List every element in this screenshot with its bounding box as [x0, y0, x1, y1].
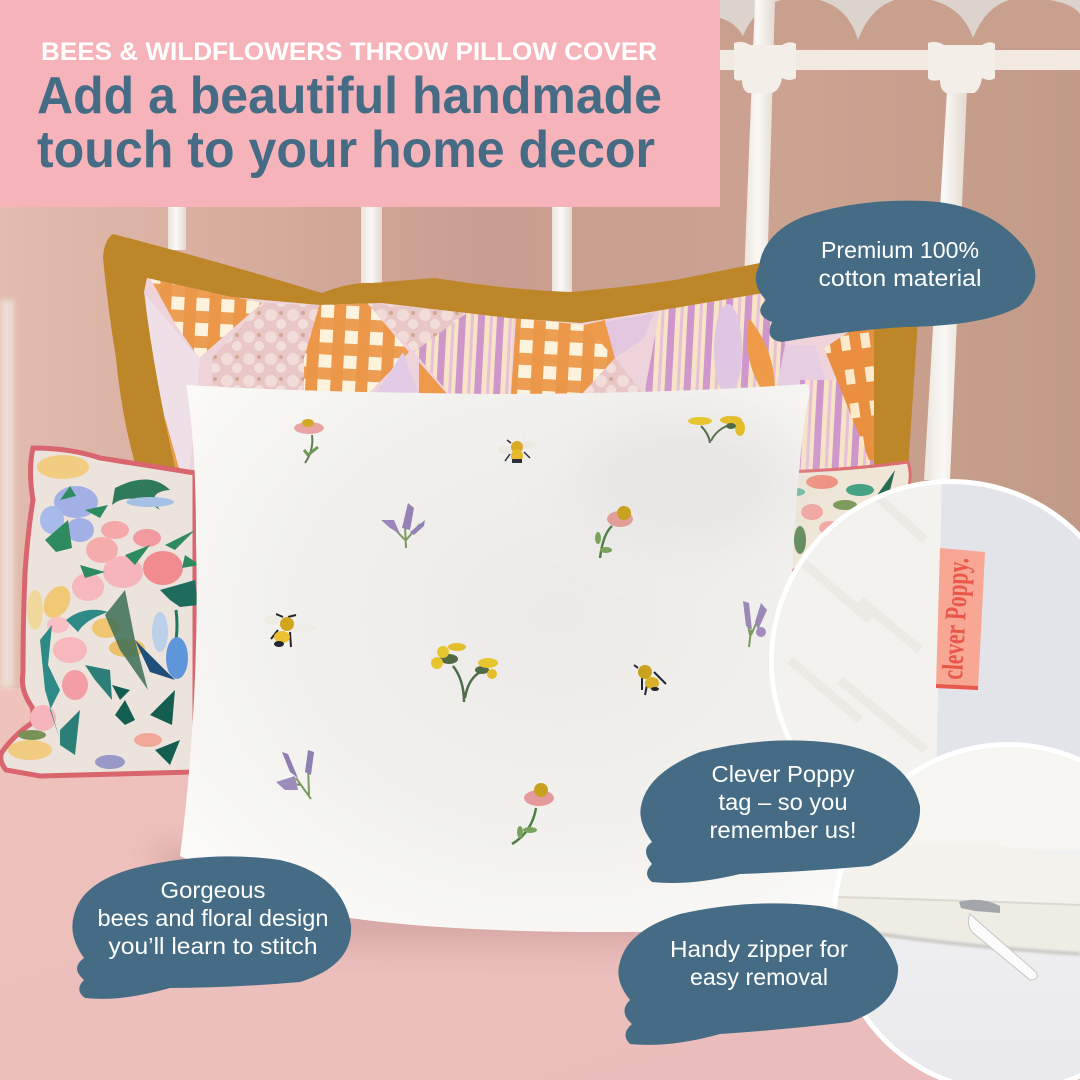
- callout: Clever Poppy tag: remember us!: [710, 817, 856, 843]
- scalloped wall border: [720, 0, 1080, 48]
- callout: zipper: [618, 903, 898, 1045]
- mustard sham pillow: [103, 234, 918, 475]
- embroidery: lavender lower left: [276, 750, 314, 799]
- embroidery: yellow flowers centre: [431, 643, 498, 702]
- headline: touch to your home decor: [37, 121, 655, 179]
- callout: Clever Poppy tag: Clever Poppy: [712, 761, 855, 787]
- callout: zipper: easy removal: [690, 964, 828, 990]
- white embroidered pillow: [180, 384, 866, 932]
- detail circle: zipper: [830, 740, 1080, 1080]
- callout: zipper: Handy zipper for: [670, 936, 848, 962]
- woven label: [936, 548, 985, 690]
- callout: design: [72, 856, 351, 999]
- woven label: clever Poppy.: [936, 557, 975, 680]
- background wall: [0, 0, 1080, 700]
- floral print: [8, 455, 200, 769]
- embroidery: yellow flowers top right: [688, 416, 745, 443]
- eyebrow text: BEES & WILDFLOWERS THROW PILLOW COVER: [41, 38, 657, 66]
- zipper pull: [959, 900, 1037, 980]
- capital left: [734, 42, 796, 93]
- embroidery: bee top centre: [498, 440, 537, 463]
- zipped pillow edge: [837, 896, 1080, 957]
- left floral pillow: [1, 448, 200, 776]
- embroidery: lavender right: [743, 601, 767, 647]
- embroidery: bee right: [619, 659, 666, 695]
- embroidery: flower top left: [294, 419, 324, 463]
- patterned quilt panel: [140, 270, 880, 475]
- callout: design: you’ll learn to stitch: [108, 933, 318, 959]
- embroidery: bee left: [264, 614, 316, 647]
- embroidery: pink flower bottom: [512, 783, 554, 844]
- headline: Add a beautiful handmade: [37, 67, 662, 125]
- header banner: [0, 0, 720, 207]
- detail circle: Clever Poppy tag: [769, 479, 1080, 776]
- shadow under white pillow: [150, 845, 860, 945]
- bed linen: [0, 688, 1080, 1080]
- bed frame: [0, 0, 1080, 688]
- callout: cotton material: cotton material: [818, 265, 982, 291]
- callout: design: bees and floral design: [98, 905, 328, 931]
- embroidery: lavender upper left: [381, 503, 425, 548]
- callout: cotton material: Premium 100%: [821, 237, 979, 263]
- callout: Clever Poppy tag: tag – so you: [718, 789, 848, 815]
- headline: [37, 67, 662, 179]
- right floral pillow peek: [780, 462, 910, 574]
- callout: Clever Poppy tag: [640, 740, 920, 883]
- capital right: [928, 42, 995, 93]
- callout: design: Gorgeous: [160, 877, 266, 903]
- callout: cotton material: [756, 201, 1035, 342]
- embroidery: pink flower centre right: [595, 506, 633, 558]
